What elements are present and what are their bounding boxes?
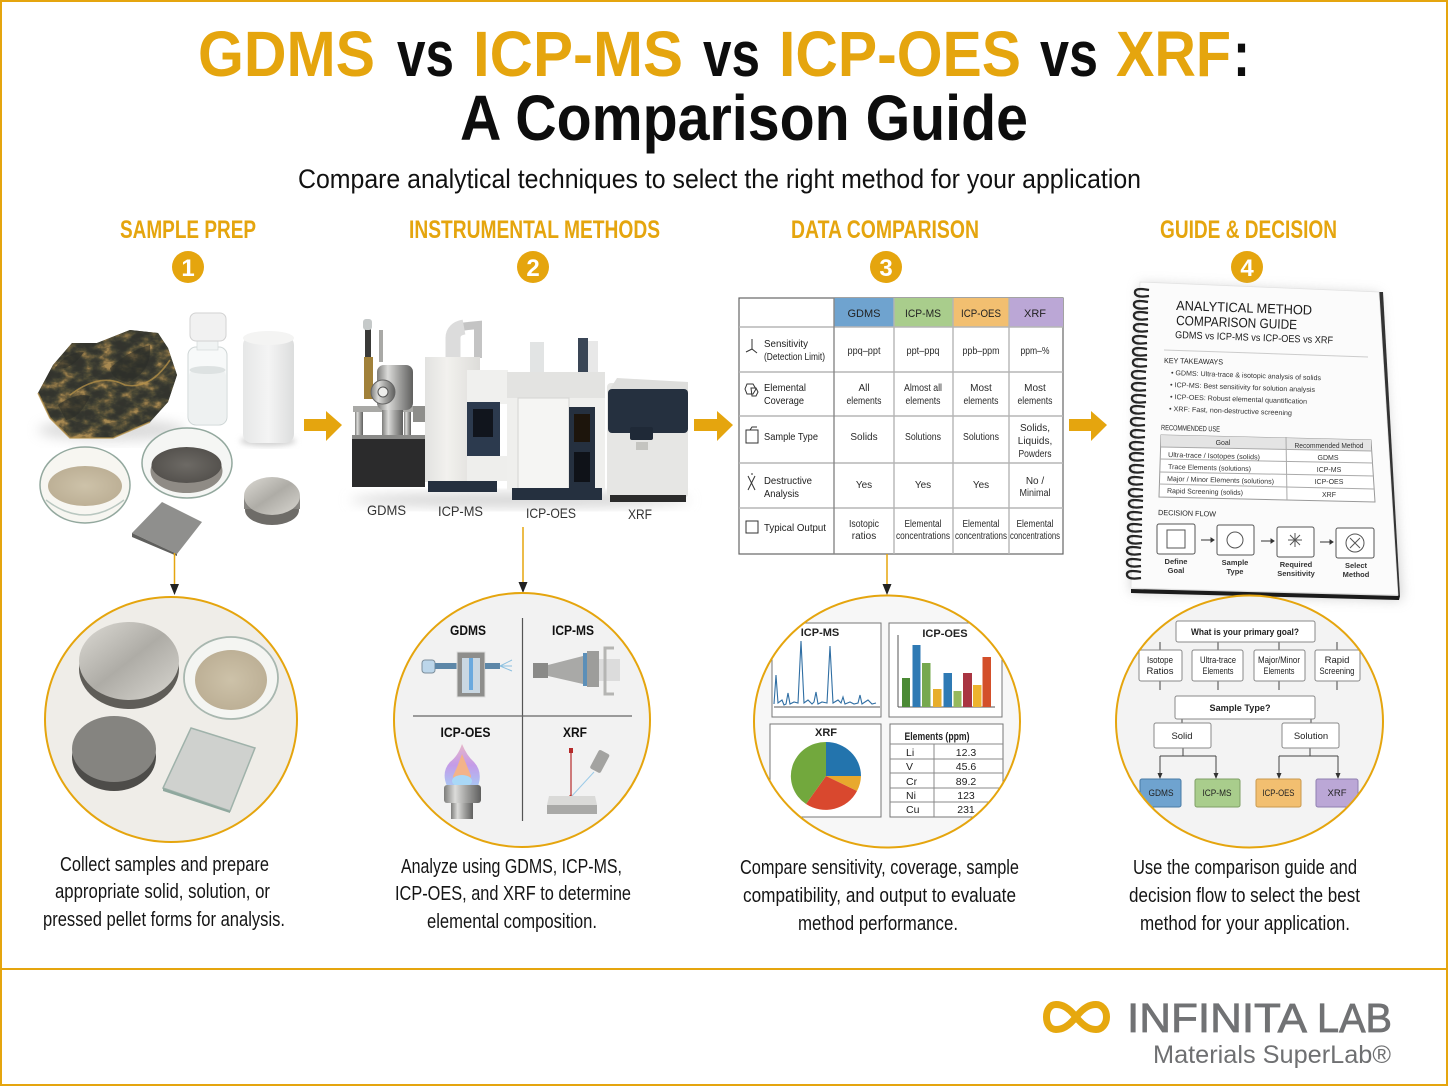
instrument labels: GDMS bbox=[367, 502, 406, 518]
row labels: Analysis bbox=[764, 488, 799, 500]
decision flow: DECISION FLOW bbox=[1158, 508, 1217, 519]
sample prep photo group bbox=[38, 313, 300, 556]
caption: data comparison bbox=[740, 857, 1019, 935]
table values: ratios bbox=[852, 531, 876, 542]
flow labels: Screening bbox=[1320, 666, 1354, 677]
table values: All bbox=[858, 383, 870, 394]
step 2 heading: INSTRUMENTAL METHODS bbox=[409, 216, 660, 244]
detail circle 2: instrument principles bbox=[394, 593, 650, 847]
notebook heading: GDMS vs ICP-MS vs ICP-OES vs XRF bbox=[1175, 330, 1333, 347]
table values: Liquids, bbox=[1018, 436, 1052, 447]
step 1 heading: 1 bbox=[181, 255, 195, 282]
instrument: XRF bbox=[607, 378, 688, 502]
table values: concentrations bbox=[896, 531, 950, 542]
recommended use table: ICP-OES bbox=[1315, 479, 1344, 486]
table values: ppt–ppq bbox=[906, 346, 940, 357]
flow labels: Isotope bbox=[1147, 655, 1173, 666]
table: element concentrations: Li bbox=[906, 747, 914, 759]
table: element concentrations: V bbox=[906, 761, 913, 773]
instrument: ICP-MS bbox=[425, 325, 508, 492]
decision flow: Define bbox=[1165, 557, 1187, 566]
arrow: data to guide bbox=[1069, 411, 1107, 441]
flow labels: Elements bbox=[1202, 666, 1234, 677]
step 2 heading: 2 bbox=[526, 255, 540, 282]
table values: Powders bbox=[1018, 449, 1052, 460]
recommended use table: XRF bbox=[1322, 492, 1336, 499]
logo: Infinita Lab: INFINITA bbox=[1127, 995, 1308, 1041]
table values: elements bbox=[964, 396, 998, 407]
logo: Infinita Lab: LAB bbox=[1317, 995, 1392, 1041]
chart: XRF pie bbox=[770, 724, 881, 817]
flow labels: Rapid bbox=[1325, 655, 1349, 666]
table values: elements bbox=[906, 396, 940, 407]
recommended use table: Goal bbox=[1216, 440, 1231, 447]
flow labels: Ultra-trace bbox=[1200, 655, 1236, 666]
table: element concentrations: Cr bbox=[906, 776, 918, 788]
caption: guide and decision bbox=[1129, 857, 1360, 935]
key takeaways: • ICP-MS: Best sensitivity for solution analysis bbox=[1170, 382, 1316, 394]
table values: concentrations bbox=[1010, 531, 1060, 542]
title: XRF bbox=[1116, 18, 1231, 90]
row labels: Coverage bbox=[764, 395, 804, 407]
caption: guide and decision: decision flow to select the best bbox=[1129, 885, 1360, 907]
table values: Minimal bbox=[1020, 488, 1050, 499]
spiral binding bbox=[1127, 289, 1149, 579]
row icons bbox=[745, 339, 758, 533]
flow labels: What is your primary goal? bbox=[1191, 627, 1299, 638]
flow labels: ICP-MS bbox=[1202, 788, 1232, 799]
title bbox=[198, 18, 1250, 154]
recommended use table bbox=[1159, 423, 1375, 502]
step 1 heading: SAMPLE PREP bbox=[120, 216, 256, 244]
flow labels: ICP-OES bbox=[1262, 788, 1294, 799]
flow labels: Ratios bbox=[1147, 666, 1174, 677]
title: ICP-OES bbox=[779, 18, 1021, 90]
table values: Elemental bbox=[962, 519, 1000, 530]
connector arrow: step 2 bbox=[518, 527, 528, 593]
recommended use table: Trace Elements (solutions) bbox=[1168, 464, 1251, 473]
detail circle 1: prepared samples bbox=[45, 597, 297, 842]
table header cells: XRF bbox=[1024, 308, 1046, 320]
flow labels: Solid bbox=[1171, 731, 1193, 742]
decision flow: Goal bbox=[1168, 566, 1184, 575]
panel: ICP-MS interface bbox=[533, 623, 620, 694]
table values: Isotopic bbox=[849, 519, 879, 530]
flow labels bbox=[1147, 627, 1354, 799]
recommended use table: GDMS bbox=[1318, 455, 1339, 462]
table values: concentrations bbox=[955, 531, 1007, 542]
table values: Elemental bbox=[1016, 519, 1054, 530]
key takeaways: • ICP-OES: Robust elemental quantification bbox=[1170, 394, 1307, 406]
icon: metal plate bbox=[132, 502, 202, 556]
caption: data comparison: method performance. bbox=[798, 913, 958, 935]
comparison table bbox=[739, 298, 1063, 554]
subtitle: Compare analytical techniques to select the right method for your application bbox=[298, 164, 1141, 194]
icon: white cylinder bbox=[240, 331, 296, 446]
table values: ppm–% bbox=[1020, 346, 1050, 357]
caption: data comparison: compatibility, and output to evaluate bbox=[743, 885, 1016, 907]
key takeaways: • GDMS: Ultra-trace & isotopic analysis of solids bbox=[1171, 370, 1322, 382]
caption: guide and decision: Use the comparison guide and bbox=[1133, 857, 1357, 879]
flow question boxes bbox=[1139, 621, 1360, 748]
instrument labels bbox=[367, 502, 652, 522]
step 3 heading bbox=[791, 216, 979, 283]
decision flow: Select bbox=[1345, 561, 1368, 570]
recommended use table: Ultra-trace / Isotopes (solids) bbox=[1168, 452, 1260, 461]
row labels: Elemental bbox=[764, 382, 806, 394]
row labels: Destructive bbox=[764, 475, 812, 487]
icon: metal disc bbox=[244, 477, 300, 525]
step 3 heading: DATA COMPARISON bbox=[791, 216, 979, 244]
table: element concentrations: 123 bbox=[957, 790, 975, 802]
caption: guide and decision: method for your application. bbox=[1140, 913, 1350, 935]
step 4 heading bbox=[1160, 216, 1337, 283]
table: element concentrations: Elements (ppm) bbox=[904, 731, 970, 743]
chart: ICP-MS spectrum: ICP-MS bbox=[801, 627, 839, 639]
key takeaways: KEY TAKEAWAYS bbox=[1164, 356, 1223, 367]
table values: Almost all bbox=[904, 383, 942, 394]
flow labels: Major/Minor bbox=[1258, 655, 1300, 666]
caption: data comparison: Compare sensitivity, coverage, sample bbox=[740, 857, 1019, 879]
icon: dish of light powder bbox=[40, 447, 130, 523]
recommended use table: ICP-MS bbox=[1317, 467, 1342, 474]
notebook heading: COMPARISON GUIDE bbox=[1176, 313, 1297, 332]
chart: XRF pie: XRF bbox=[815, 727, 837, 739]
title: GDMS bbox=[198, 18, 375, 90]
table header cells: ICP-MS bbox=[905, 308, 941, 320]
table values: elements bbox=[1018, 396, 1052, 407]
icon: powder dish bbox=[184, 637, 278, 719]
step 4 heading: GUIDE & DECISION bbox=[1160, 216, 1337, 244]
table: element concentrations: Cu bbox=[906, 804, 920, 816]
instrument: GDMS bbox=[352, 319, 425, 487]
recommended use table: Rapid Screening (solids) bbox=[1167, 488, 1243, 497]
table header cells: GDMS bbox=[848, 308, 880, 320]
table values: Most bbox=[970, 383, 992, 394]
table header cells: ICP-OES bbox=[961, 308, 1001, 320]
row labels: Typical Output bbox=[764, 522, 826, 534]
flow outcome boxes bbox=[1140, 779, 1358, 807]
decision flow: Required bbox=[1280, 560, 1313, 569]
logo: Infinita Lab: Materials SuperLab® bbox=[1153, 1041, 1392, 1069]
table values: Yes bbox=[973, 480, 989, 491]
title: A Comparison Guide bbox=[460, 82, 1028, 154]
icon: glass plate bbox=[163, 728, 255, 813]
panel: XRF beam bbox=[547, 725, 610, 814]
title: : bbox=[1233, 18, 1250, 90]
caption: instrumental methods bbox=[395, 856, 631, 933]
notebook heading bbox=[1175, 298, 1333, 347]
instrument: ICP-OES bbox=[507, 338, 605, 500]
table values: Yes bbox=[856, 480, 872, 491]
spiral notebook bbox=[1127, 282, 1402, 600]
table: element concentrations: 231 bbox=[957, 804, 975, 816]
logo: Infinita Lab bbox=[1046, 995, 1392, 1069]
table values: Solids, bbox=[1020, 423, 1050, 434]
table values: elements bbox=[846, 396, 882, 407]
flow labels: Elements bbox=[1264, 666, 1295, 677]
recommended use table: Recommended Method bbox=[1294, 443, 1364, 450]
table values: ppb–ppm bbox=[962, 346, 1000, 357]
panel: ICP-MS interface: ICP-MS bbox=[552, 623, 594, 638]
icon: glass vial bbox=[188, 313, 227, 425]
title: ICP-MS bbox=[473, 18, 683, 90]
flow labels: Solution bbox=[1294, 731, 1328, 742]
decision flow: Sensitivity bbox=[1277, 569, 1316, 578]
arrow: instruments to data bbox=[694, 411, 733, 441]
flow labels: XRF bbox=[1328, 788, 1347, 799]
panel: XRF beam: XRF bbox=[563, 725, 587, 740]
decision flow: Sample bbox=[1222, 558, 1248, 567]
chart: ICP-OES bars bbox=[889, 623, 1002, 717]
table: element concentrations: 89.2 bbox=[956, 776, 976, 788]
detail circle 3: data outputs bbox=[754, 596, 1020, 848]
step 2 heading bbox=[409, 216, 660, 283]
icon: dish of dark powder bbox=[142, 428, 232, 498]
instrument labels: ICP-MS bbox=[438, 503, 483, 519]
icon: large metal disc bbox=[79, 622, 179, 709]
caption: instrumental methods: ICP-OES, and XRF to determine bbox=[395, 883, 631, 905]
icon: pressed pellet bbox=[72, 716, 156, 791]
panel: GDMS source bbox=[422, 623, 512, 697]
instrument line-up bbox=[350, 319, 690, 507]
table values: Solutions bbox=[963, 432, 999, 443]
caption: sample prep: appropriate solid, solution, or bbox=[55, 881, 270, 903]
icon: infinity mark bbox=[1046, 1004, 1106, 1030]
table: element concentrations bbox=[890, 724, 1003, 817]
recommended use table: Major / Minor Elements (solutions) bbox=[1167, 476, 1274, 486]
table values: Solids bbox=[850, 432, 878, 443]
row labels: Sensitivity bbox=[764, 338, 809, 350]
table values: Yes bbox=[915, 480, 931, 491]
flow labels: GDMS bbox=[1148, 788, 1174, 799]
table values: ppq–ppt bbox=[848, 346, 881, 357]
table values: Solutions bbox=[905, 432, 941, 443]
title: vs bbox=[397, 18, 454, 90]
row labels bbox=[764, 338, 826, 534]
step 1 heading bbox=[120, 216, 256, 283]
decision flow bbox=[1157, 508, 1374, 579]
row labels: (Detection Limit) bbox=[764, 351, 825, 363]
panel: GDMS source: GDMS bbox=[450, 623, 486, 638]
caption: instrumental methods: Analyze using GDMS, ICP-MS, bbox=[401, 856, 622, 878]
flow connectors bbox=[1160, 642, 1338, 775]
title: vs bbox=[703, 18, 760, 90]
panel: ICP-OES plasma: ICP-OES bbox=[440, 725, 490, 740]
flow labels: Sample Type? bbox=[1210, 703, 1271, 714]
table header cells bbox=[834, 298, 1063, 327]
chart: ICP-MS spectrum bbox=[772, 623, 881, 717]
table values bbox=[846, 346, 1060, 542]
connector arrow: step 1 bbox=[170, 553, 179, 595]
step 4 heading: 4 bbox=[1240, 255, 1254, 282]
panel: ICP-OES plasma bbox=[440, 725, 490, 819]
caption: sample prep: pressed pellet forms for analysis. bbox=[43, 909, 285, 931]
connector arrow: step 3 bbox=[882, 554, 892, 595]
key takeaways bbox=[1164, 356, 1322, 417]
caption: sample prep: Collect samples and prepare bbox=[60, 854, 269, 876]
table: element concentrations: 45.6 bbox=[956, 761, 976, 773]
decision flow: Type bbox=[1227, 567, 1243, 576]
instrument labels: ICP-OES bbox=[526, 505, 576, 521]
chart: ICP-OES bars: ICP-OES bbox=[922, 628, 968, 640]
icon: rock sample bbox=[38, 330, 186, 441]
row labels: Sample Type bbox=[764, 431, 818, 443]
table values: Elemental bbox=[904, 519, 942, 530]
table: element concentrations: 12.3 bbox=[956, 747, 976, 759]
table: element concentrations: Ni bbox=[906, 790, 916, 802]
notebook heading: ANALYTICAL METHOD bbox=[1176, 298, 1313, 318]
caption: sample prep bbox=[43, 854, 285, 931]
table values: No / bbox=[1026, 476, 1044, 487]
decision flow: Method bbox=[1343, 570, 1370, 579]
table values: Most bbox=[1024, 383, 1046, 394]
caption: instrumental methods: elemental composition. bbox=[427, 911, 597, 933]
instrument labels: XRF bbox=[628, 506, 652, 522]
step 3 heading: 3 bbox=[879, 255, 893, 282]
recommended use table: RECOMMENDED USE bbox=[1161, 423, 1220, 434]
title: vs bbox=[1040, 18, 1098, 90]
detail circle 4: decision flowchart bbox=[1116, 596, 1383, 848]
key takeaways: • XRF: Fast, non-destructive screening bbox=[1169, 406, 1292, 417]
arrow: sample prep to instruments bbox=[304, 411, 342, 441]
